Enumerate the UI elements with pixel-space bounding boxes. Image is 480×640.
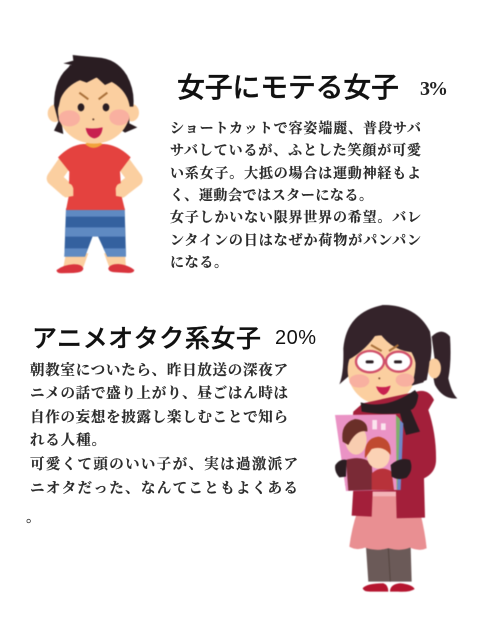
cheeks: [59, 110, 80, 126]
text block: description of 女子にモテる女子: い系女子。大抵の場合は運動神経もよ: [170, 165, 421, 182]
hands: [62, 183, 126, 197]
text block: description of アニメオタク系女子: ニオタだった、なんてこともよくある: [30, 480, 298, 497]
fringe: [344, 305, 430, 386]
text block: description of アニメオタク系女子: ニメの話で盛り上がり、昼ごはん時は: [30, 384, 288, 402]
book characters: [346, 458, 373, 491]
shoes: [57, 264, 134, 273]
mouth: [376, 386, 391, 395]
coat: [345, 391, 436, 518]
face: [58, 78, 130, 144]
text block: description of 女子にモテる女子: [170, 120, 421, 271]
skirt band: [373, 492, 396, 496]
ear: [428, 358, 441, 378]
illustration: anime otaku girl holding a doujinshi: [335, 305, 457, 592]
skirt: [349, 490, 427, 550]
percentage 20%: 20%: [275, 327, 316, 349]
hair back: [339, 305, 431, 386]
book title mark: [372, 420, 386, 430]
heading: アニメオタク系女子: アニメオタク系女子: [32, 325, 261, 353]
text block: description of 女子にモテる女子: ンタインの日はなぜか荷物がパンパン: [170, 232, 421, 249]
text block: description of 女子にモテる女子: 女子しかいない限界世界の希望。バレ: [170, 209, 421, 226]
text block: description of アニメオタク系女子: 可愛くて頭のいい子が、実は過激派ア: [30, 455, 298, 473]
shoes: [363, 583, 415, 592]
text block: description of アニメオタク系女子: 自作の妄想を披露し楽しむことで知ら: [30, 408, 288, 426]
heading: 女子にモテる女子: 女子にモテる女子: [177, 72, 399, 103]
text block: description of アニメオタク系女子: れる人種。: [30, 432, 106, 449]
text block: description of 女子にモテる女子: になる。: [170, 255, 228, 271]
text block: description of 女子にモテる女子: ショートカットで容姿端麗、普段サバ: [170, 120, 421, 137]
book pages: [393, 415, 403, 490]
arms: [54, 164, 67, 190]
illustration: sporty girl with short hair: [48, 55, 139, 273]
brows: [371, 345, 398, 351]
text block: description of 女子にモテる女子: く、運動会ではスターになる。: [170, 187, 373, 204]
shorts: [64, 208, 126, 257]
gloves: [335, 460, 347, 477]
legs: [63, 253, 126, 267]
fringe: [58, 65, 131, 108]
text block: description of アニメオタク系女子: 朝教室についたら、昨日放送の深夜ア: [30, 361, 288, 379]
hair back: [54, 55, 137, 134]
ears: [48, 105, 62, 122]
text block: description of アニメオタク系女子: [26, 361, 298, 526]
mouth: [86, 127, 103, 138]
ponytail: [432, 332, 457, 398]
book cover: [335, 414, 397, 491]
glasses: [356, 351, 411, 372]
face: [348, 335, 416, 405]
stockings: [366, 547, 412, 582]
text block: description of アニメオタク系女子: 。: [26, 510, 40, 526]
shirt: [58, 144, 131, 210]
text block: description of 女子にモテる女子: サバしているが、ふとした笑顔が可愛: [170, 142, 421, 159]
percentage 3%: 3%: [420, 78, 448, 100]
eyes and brows: [78, 103, 84, 111]
scarf: [361, 390, 420, 435]
